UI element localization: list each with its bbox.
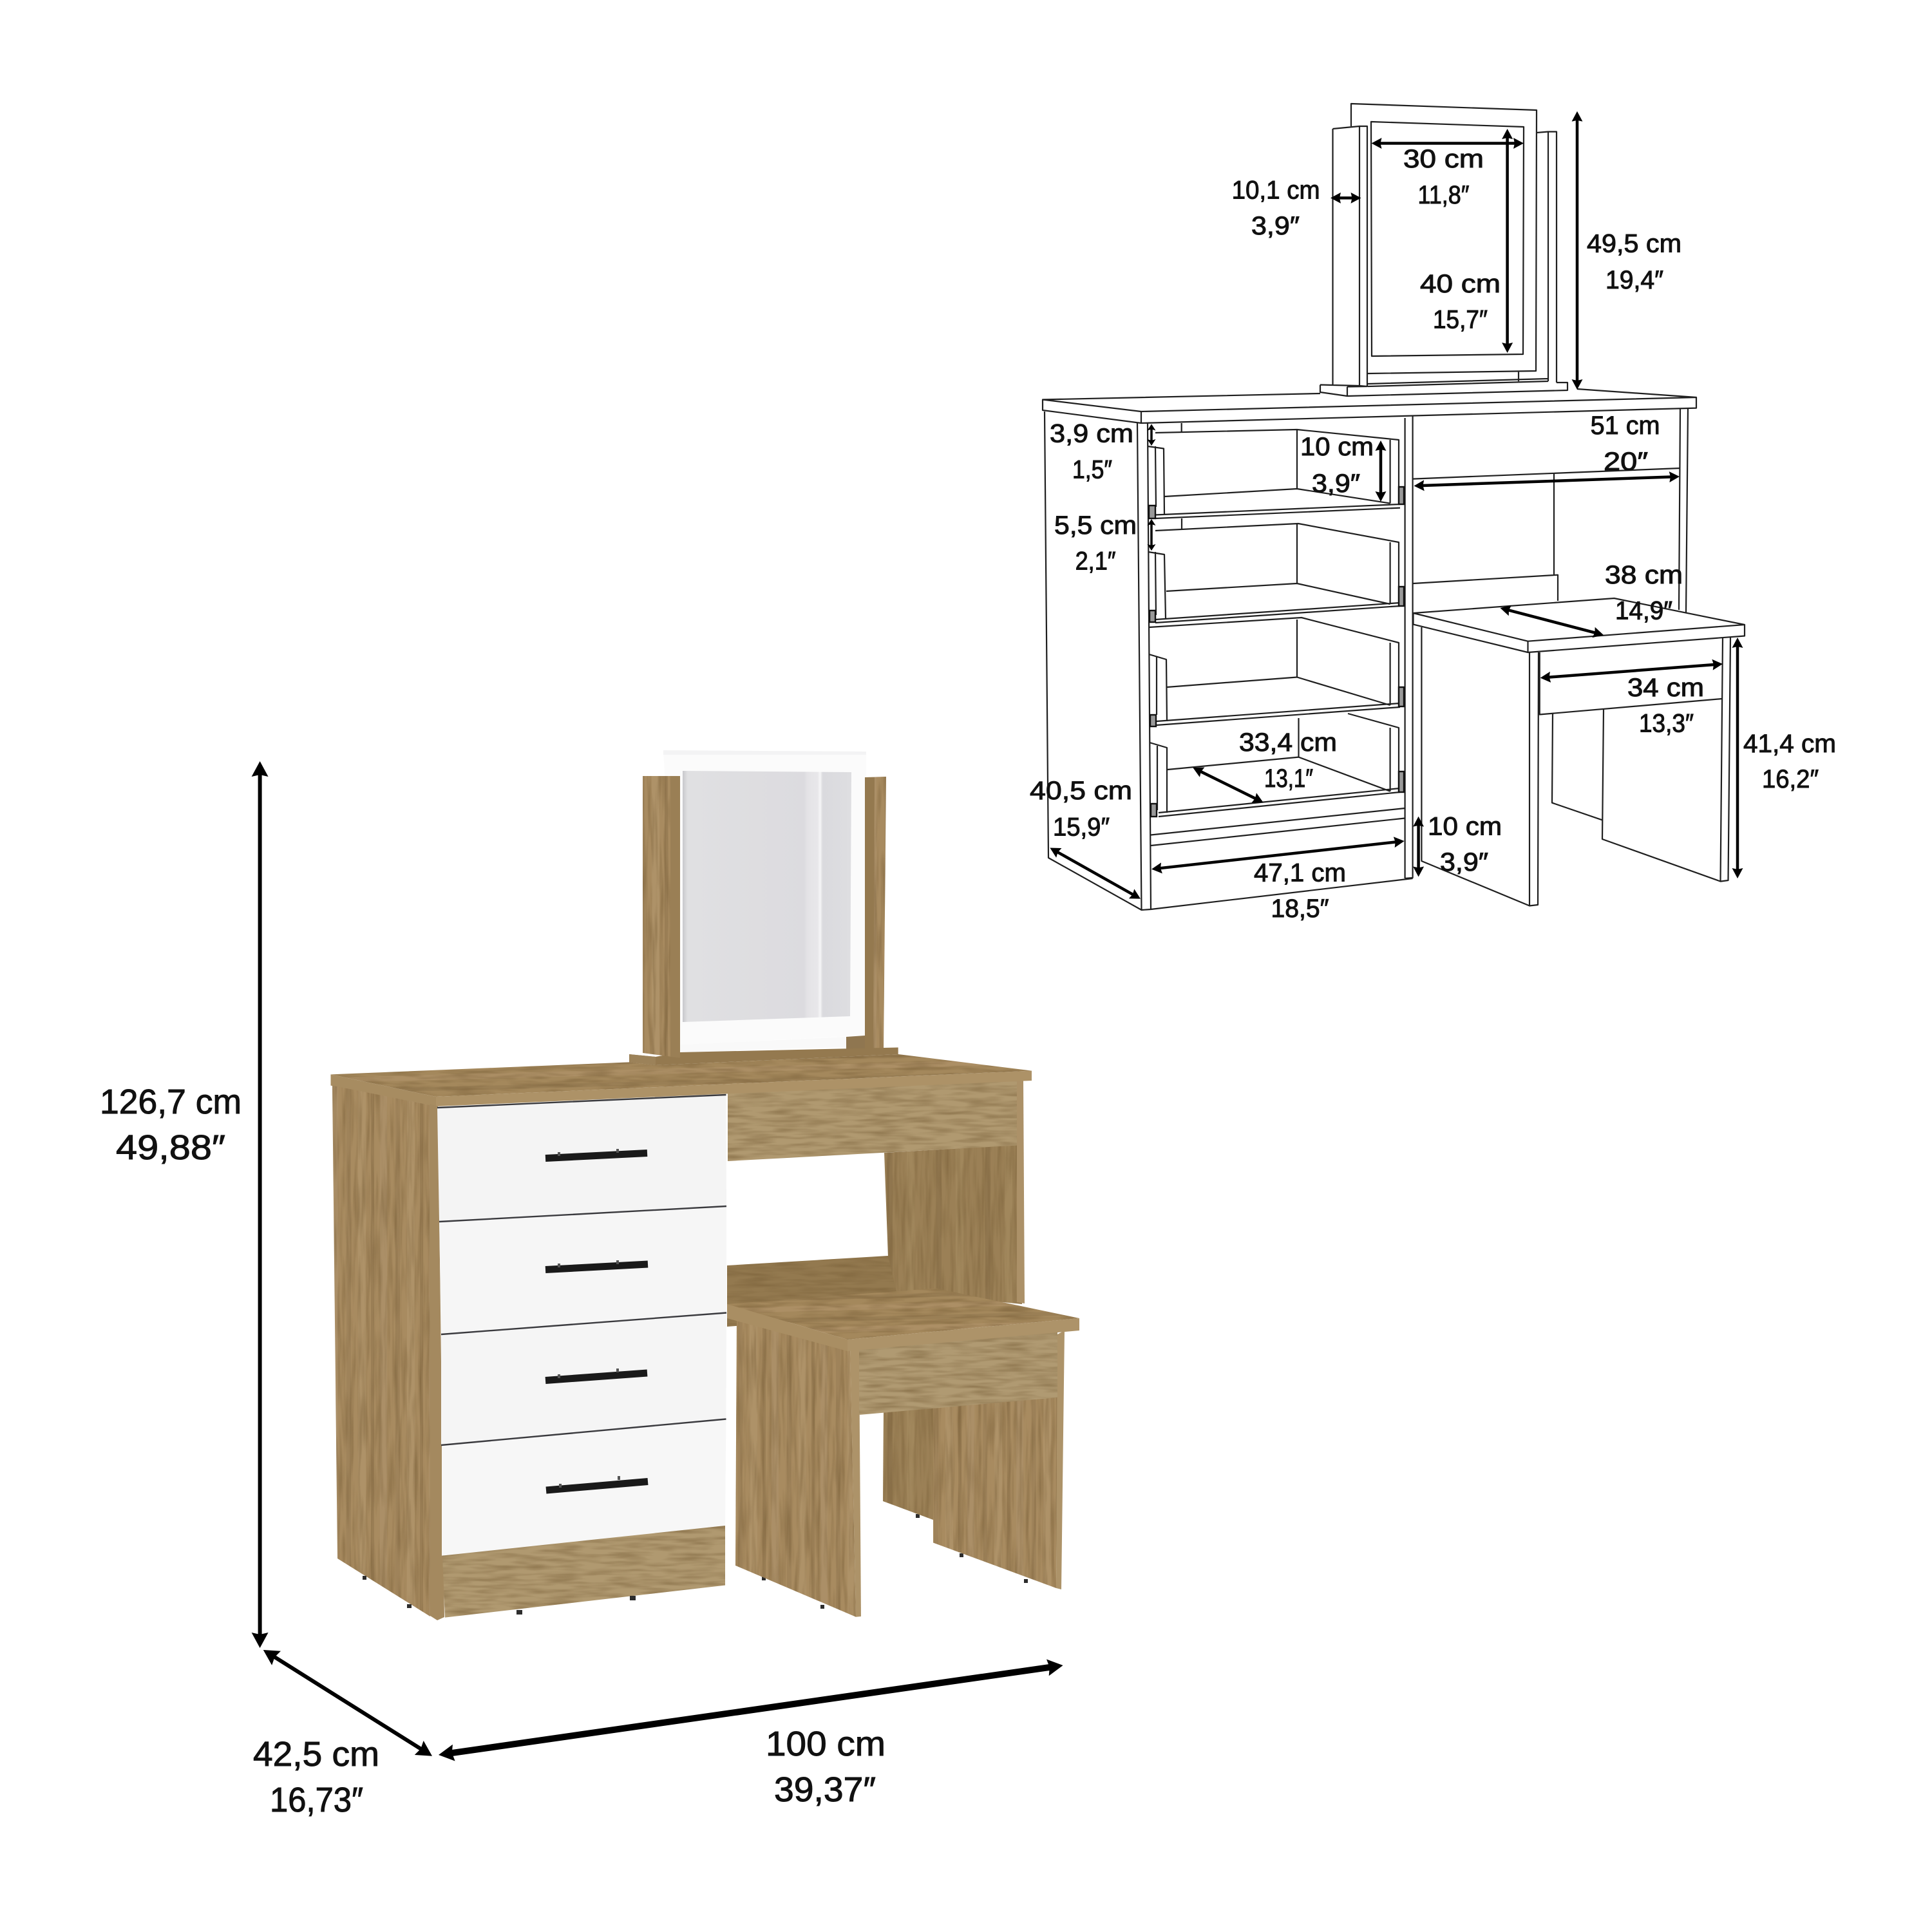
arrow: overall depth: [274, 1657, 421, 1749]
label: drawer width: 47,1 cm: [1254, 859, 1346, 887]
label: drawer gap: 5,5 cm: [1054, 511, 1137, 540]
arrow: stool depth: [1508, 610, 1595, 633]
arrow: stool width: [1549, 665, 1714, 677]
label: drawer height: 3,9″: [1312, 469, 1360, 498]
label: plinth height: [1428, 813, 1502, 876]
label: mirror width: 30 cm: [1403, 145, 1484, 173]
photo: vanity desk with mirror and stool: [331, 750, 1079, 1620]
arrow: overall height: [258, 774, 262, 1635]
label: mirror post: 10,1 cm: [1232, 176, 1320, 205]
dimension arrows: [260, 120, 1738, 1753]
label: stool depth: 38 cm: [1605, 561, 1683, 589]
label: mirror assembly height: 49,5 cm: [1587, 230, 1681, 258]
label: mirror height: 15,7″: [1433, 305, 1488, 334]
label: stool height: 41,4 cm: [1743, 730, 1836, 758]
label: drawer depth: 33,4 cm: [1239, 728, 1337, 757]
label: stool height: [1743, 730, 1836, 793]
label: knee space width: 20″: [1604, 448, 1648, 476]
label: stool width: [1627, 674, 1704, 738]
drawer fronts: [437, 1095, 726, 1556]
label: knee space width: [1591, 412, 1660, 476]
drawer handles: [545, 1149, 648, 1490]
label: desk side depth: 40,5 cm: [1030, 777, 1132, 805]
arrow: knee space width: [1422, 477, 1671, 486]
label: overall depth: [253, 1735, 379, 1819]
label: mirror post: 3,9″: [1251, 212, 1300, 240]
label: overall depth: 42,5 cm: [253, 1735, 379, 1774]
drawer runners: [1149, 487, 1404, 817]
arrow: drawer depth: [1200, 772, 1256, 799]
desk back lower panel: [727, 1256, 902, 1327]
desk left side panel: [332, 1086, 430, 1616]
arrow: stool height: [1736, 646, 1739, 870]
label: drawer height: [1300, 433, 1374, 498]
label: mirror post: [1232, 176, 1320, 240]
label: overall width: 39,37″: [774, 1770, 876, 1809]
arrow: desk side depth: [1057, 852, 1133, 895]
mirror: [663, 750, 866, 1052]
label: plinth height: 10 cm: [1428, 813, 1502, 841]
label: drawer depth: 13,1″: [1264, 764, 1313, 793]
label: drawer height: 10 cm: [1300, 433, 1374, 461]
arrow: drawer width: [1160, 842, 1396, 868]
label: drawer gap: [1054, 511, 1137, 576]
label: overall width: [766, 1725, 886, 1809]
label: desk side depth: [1030, 777, 1132, 842]
label: mirror width: 11,8″: [1418, 181, 1470, 209]
stool front leg: [735, 1314, 861, 1617]
label: overall depth: 16,73″: [270, 1781, 363, 1819]
label: stool depth: 14,9″: [1615, 596, 1672, 625]
label: drawer gap: 2,1″: [1075, 547, 1116, 576]
label: overall height: 126,7 cm: [100, 1083, 242, 1121]
stool apron: [859, 1327, 1057, 1415]
arrow: mirror post width: [1339, 196, 1352, 200]
desk right leg: [884, 1081, 1025, 1304]
dimension labels: [100, 145, 1836, 1819]
arrow: overall width: [451, 1667, 1050, 1753]
arrow: drawer gap: [1150, 524, 1153, 545]
label: mirror height: 40 cm: [1420, 270, 1501, 298]
label: overall width: 100 cm: [766, 1725, 886, 1763]
label: knee space width: 51 cm: [1591, 412, 1660, 440]
label: top rail gap: [1050, 420, 1133, 484]
furniture feet: [363, 1514, 1028, 1615]
label: plinth height: 3,9″: [1440, 848, 1488, 876]
arrow: mirror width: [1379, 142, 1515, 145]
mirror outline: [1320, 104, 1567, 396]
mirror posts and base: [629, 776, 898, 1065]
arrow: mirror height: [1506, 137, 1509, 345]
label: top rail gap: 3,9 cm: [1050, 420, 1133, 448]
arrow: plinth height: [1417, 825, 1420, 868]
label: overall height: 49,88″: [116, 1128, 225, 1167]
label: desk side depth: 15,9″: [1053, 813, 1110, 842]
label: stool width: 13,3″: [1639, 710, 1694, 738]
desk top outline: [1043, 389, 1696, 423]
drawer 1: [1148, 430, 1400, 518]
label: mirror height: [1420, 270, 1501, 334]
arrow: mirror assembly height: [1576, 120, 1578, 381]
desk top: [331, 1054, 1032, 1106]
stool seat: [727, 1288, 1079, 1351]
desk side front strip: [430, 1104, 444, 1620]
label: mirror assembly height: 19,4″: [1605, 266, 1663, 294]
desk apron: [728, 1079, 1017, 1161]
technical line drawing: [1043, 104, 1745, 910]
label: stool width: 34 cm: [1627, 674, 1704, 702]
label: stool depth: [1605, 561, 1683, 625]
drawer 2: [1148, 524, 1400, 623]
label: drawer depth: [1239, 728, 1337, 793]
label: mirror assembly height: [1587, 230, 1681, 294]
drawer 3: [1149, 618, 1400, 725]
arrow: drawer height: [1379, 449, 1382, 493]
drawer 4: [1150, 714, 1400, 817]
label: drawer width: 18,5″: [1271, 895, 1329, 923]
desk plinth: [442, 1526, 725, 1618]
label: drawer width: [1254, 859, 1346, 923]
label: top rail gap: 1,5″: [1072, 456, 1112, 484]
stool outline: [1413, 598, 1745, 905]
arrow: top rail gap: [1150, 429, 1153, 440]
label: mirror width: [1403, 145, 1484, 209]
label: overall height: [100, 1083, 242, 1167]
desk carcass outline: [1045, 409, 1688, 910]
label: stool height: 16,2″: [1762, 765, 1819, 793]
stool back legs: [883, 1331, 1065, 1589]
